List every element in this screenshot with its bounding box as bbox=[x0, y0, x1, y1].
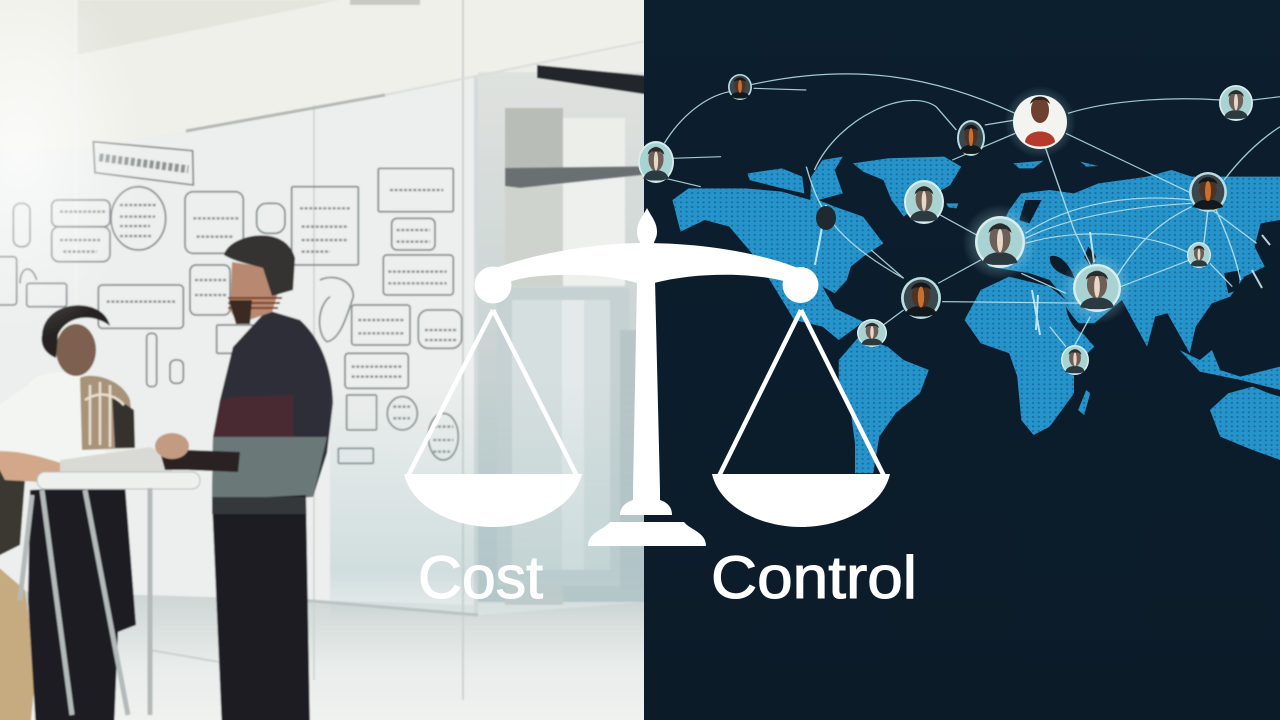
back wall bbox=[0, 480, 474, 604]
Greenland bbox=[853, 157, 961, 217]
node: Middle East portrait bbox=[1073, 264, 1121, 312]
Australia bbox=[1210, 387, 1280, 460]
Iceland and islands bbox=[946, 161, 1098, 208]
node: North America smudge bbox=[816, 206, 836, 230]
bright glass haze bbox=[0, 0, 150, 340]
node: Greenland portrait bbox=[904, 180, 944, 224]
node: top-left portrait bbox=[728, 74, 752, 100]
woman bbox=[0, 305, 136, 720]
node: far-left portrait bbox=[638, 141, 674, 183]
Madagascar bbox=[1078, 390, 1090, 415]
man bbox=[155, 235, 333, 720]
node: North Atlantic portrait bbox=[957, 120, 985, 156]
city light streaks bbox=[815, 205, 1270, 335]
left pan bbox=[404, 310, 582, 527]
Indonesia bbox=[1180, 350, 1280, 390]
ceiling bbox=[0, 0, 670, 150]
node: East Asia portrait bbox=[1187, 242, 1211, 268]
world map bbox=[672, 157, 1280, 473]
node: Europe portrait bbox=[975, 216, 1025, 268]
node: South America portrait bbox=[857, 319, 887, 347]
whiteboard sketches bbox=[0, 142, 462, 463]
scale post and finial bbox=[633, 208, 660, 500]
node: Asia portrait bbox=[1189, 172, 1227, 212]
node: top-right portrait bbox=[1219, 85, 1253, 121]
glass frames bbox=[76, 0, 670, 720]
room behind glass bbox=[478, 72, 644, 602]
left foreground figure bbox=[0, 468, 35, 720]
South America bbox=[839, 337, 929, 473]
connection lines bbox=[644, 74, 1280, 347]
node: East Africa portrait bbox=[1061, 345, 1089, 375]
node: Atlantic portrait bbox=[901, 277, 941, 319]
node: large featured person bbox=[1013, 95, 1067, 149]
Canadian arctic islands bbox=[747, 168, 804, 193]
scale beam bbox=[490, 243, 803, 292]
North America bbox=[672, 157, 883, 340]
panel: network world map bbox=[638, 0, 1280, 720]
network nodes bbox=[638, 74, 1253, 375]
label: Control: Control bbox=[711, 544, 917, 611]
right pan bbox=[712, 310, 890, 527]
seas cut out of the land bbox=[1019, 200, 1240, 335]
Eurasia bbox=[977, 170, 1280, 353]
label: Cost: Cost bbox=[418, 544, 543, 611]
floor bbox=[0, 590, 670, 720]
panel: glass office bbox=[0, 0, 670, 720]
scale base bbox=[620, 500, 672, 515]
table bbox=[20, 447, 200, 715]
Africa bbox=[965, 277, 1094, 435]
icon: balance scale bbox=[404, 208, 890, 546]
